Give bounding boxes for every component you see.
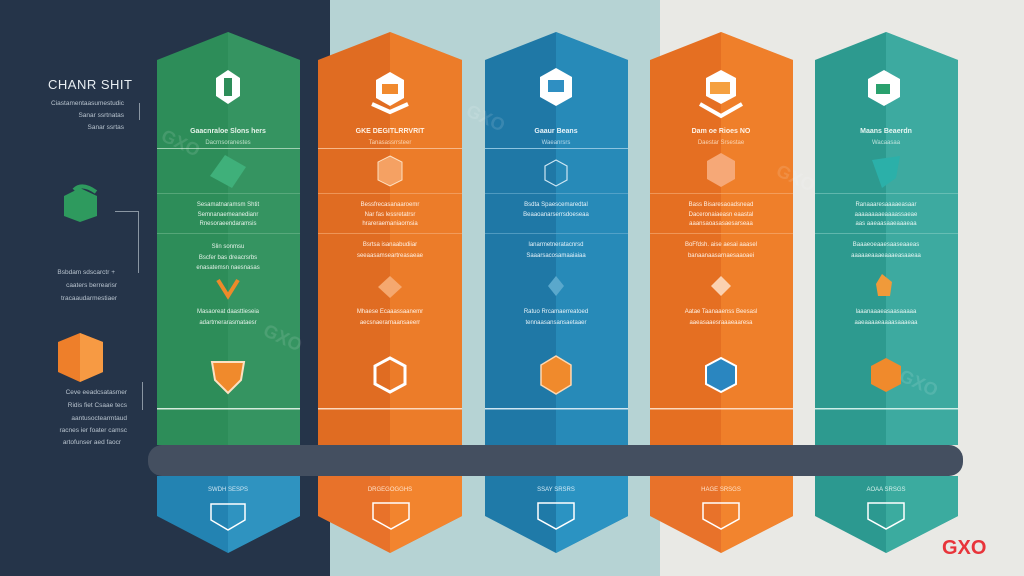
column 3: blue: Saaarsacosamaaiaiaa xyxy=(526,253,586,259)
column 4: orange: Daestar Srsestae xyxy=(698,140,745,146)
column 2: orange: hrareraemaniaornsia xyxy=(362,221,418,227)
column 2: orange: seeaasamseartreasaeae xyxy=(357,253,424,259)
sidebar text block 3: aantusoctearmtaud xyxy=(71,415,127,422)
watermark: GXO xyxy=(260,320,305,356)
column 1: green: Rnesoraeendaramsis xyxy=(199,221,257,227)
column 3: blue: Gaaur Beans xyxy=(534,128,578,135)
left sidebar xyxy=(48,77,143,446)
column 3: blue: Ratuo Rrcamaerreatoed xyxy=(524,309,588,315)
icon: top box xyxy=(372,72,408,112)
sidebar text block 2: caaters berrearisr xyxy=(66,282,118,289)
column 1: green: Sesamatnaramsm Shtit xyxy=(197,202,260,208)
watermark: GXO xyxy=(463,100,508,136)
column 5: teal: laaanaaaeasaasaaaaa xyxy=(856,309,917,315)
column 1: green: adartmerarasmataesr xyxy=(199,320,257,326)
sidebar intro text: Sanar ssrtas xyxy=(88,124,125,131)
sidebar intro text: Ciastamentaasumestudic xyxy=(51,100,125,107)
column 1: green xyxy=(157,32,300,553)
column 2: orange: Bessfrecasanaaroemr xyxy=(361,202,419,208)
column 3: blue: tennaasansansaetaaer xyxy=(525,320,587,326)
column 1: green: Gaacnraloe Slons hers xyxy=(190,128,266,135)
sidebar text block 2: Bsbdam sdscarctr + xyxy=(57,269,115,276)
column 5: teal: aaeaaaaeaaaasaaaeaa xyxy=(854,320,918,326)
column 3: blue: Bsdta Spaescemaredtal xyxy=(524,202,588,208)
icon: orange cube xyxy=(58,333,103,382)
column 2: orange: GKE DEGITLRRVRIT xyxy=(356,128,425,135)
column 4: orange: banaanaasarnaesaaoaei xyxy=(688,253,754,259)
column 4: orange: Aatae Taanaaenss Beesasl xyxy=(685,309,757,315)
column 2: orange: aecsnaerarnaansaeerr xyxy=(360,320,420,326)
column 5: teal: aaaaaeaaaeaaaeasaaeaa xyxy=(851,253,922,259)
icon: top hex xyxy=(216,70,240,104)
column 5: teal: Wacaasaa xyxy=(872,140,901,146)
sidebar text block 3: artofunser aed faocr xyxy=(63,439,122,446)
column 4: orange: HAGE SRSGS xyxy=(701,487,741,493)
sidebar text block 2 xyxy=(57,269,118,302)
sidebar intro text: Sanar ssrtnatas xyxy=(78,112,125,119)
column 1: green: Slin sonmsu xyxy=(212,244,244,250)
column 5: teal: Maans Beaerdn xyxy=(860,128,912,135)
sidebar intro text xyxy=(51,100,140,131)
column 1: green: SWDH SESPS xyxy=(208,487,248,493)
column 2: orange: Tanasassrrsteer xyxy=(369,140,411,146)
column 5: teal: aaaaaaaaeaaaassaeae xyxy=(855,212,918,218)
column 3: blue: lanarmetneratacnrsd xyxy=(528,242,584,248)
sidebar text block 2: tracaaudarmestiaer xyxy=(61,295,118,302)
column 2: orange xyxy=(318,32,462,553)
icon: top hex xyxy=(868,70,900,106)
icon: green hex tag xyxy=(64,186,139,273)
column 5: teal: aas aaeaasaaeaaaeaa xyxy=(855,221,917,227)
column 3: blue xyxy=(485,32,628,553)
sidebar text block 3: Ceve eeadcsatasmer xyxy=(66,389,128,396)
column 2: orange: Mhaese Ecaaassaanemr xyxy=(357,309,423,315)
icon: top hex xyxy=(540,68,572,106)
column 4: orange: aaeasaaesraaaeaaresa xyxy=(689,320,753,326)
sidebar text block 3 xyxy=(59,382,143,446)
column 4: orange: aaansaoasasaesarseaa xyxy=(689,221,754,227)
icon: top building xyxy=(700,70,742,116)
column 5: teal xyxy=(815,32,958,553)
watermark: GXO xyxy=(158,125,203,161)
column 3: blue: Beaaoanarserrsdoeseaa xyxy=(523,212,590,218)
watermark: GXO xyxy=(773,160,818,196)
column 5: teal: AOAA SRSGS xyxy=(866,487,906,493)
column 4: orange: Bass Bisaresaoadsnead xyxy=(689,202,753,208)
column 4: orange: Dam oe Rioes NO xyxy=(692,128,751,135)
column 4: orange: Daceronaiaeasn eaastal xyxy=(689,212,753,218)
column 2: orange: DRGEGOGGHS xyxy=(368,487,412,493)
column 3: blue: SSAY SRSRS xyxy=(537,487,575,493)
column 5: teal: Baaaeoeaaesaaseaaeas xyxy=(853,242,919,248)
watermark: GXO xyxy=(896,365,941,401)
column 1: green: Dacrnsoranestes xyxy=(205,140,251,146)
column 2: orange: Bsrtsa isanaabudiiar xyxy=(363,242,417,248)
sidebar title: CHANR SHIT xyxy=(48,77,132,92)
watermark xyxy=(158,100,941,401)
column 1: green: Bscfer bas dreacrsrbs xyxy=(199,255,257,261)
sidebar text block 3: Ridis fiet Csaae tecs xyxy=(68,402,128,409)
column 1: green: Masaoreat daasttieseia xyxy=(197,309,260,315)
column 1: green: Semnanaemeanedianr xyxy=(198,212,258,218)
column 2: orange: Nar fas lessretatrsr xyxy=(365,212,415,218)
column 3: blue: Waeanrsrs xyxy=(542,140,570,146)
column 1: green: enasatemsn naesnasas xyxy=(196,265,260,271)
horizontal bar xyxy=(148,445,963,476)
column 4: orange: BoFfdsh. aise aesai aaasel xyxy=(685,242,757,248)
sidebar text block 3: racnes ier foater camsc xyxy=(59,427,128,434)
column 5: teal: Ranaaaresaaaaeasaar xyxy=(855,202,917,208)
logo: GXO xyxy=(942,537,986,559)
column 4: orange xyxy=(650,32,793,553)
